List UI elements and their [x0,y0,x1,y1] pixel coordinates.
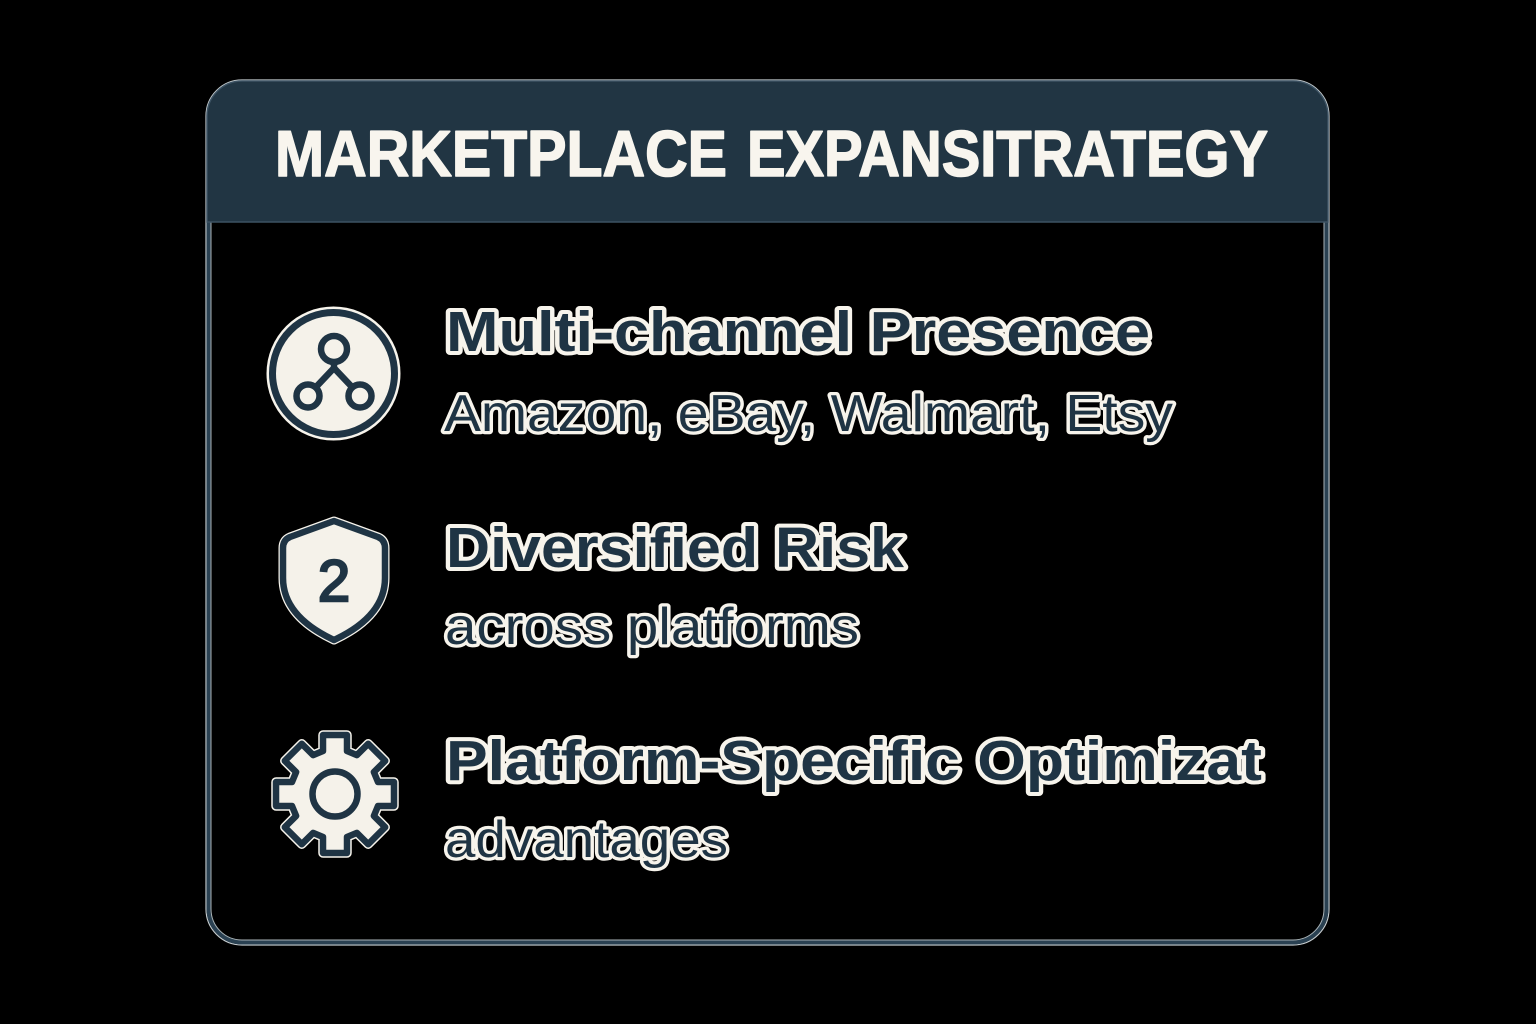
panel: marketplace expansion card [206,80,1329,945]
heading: platform-specific optimization: Platform-Specific Optimizat [446,729,1262,793]
text: marketplaces list: Amazon, eBay, Walmart, Etsy [444,385,1173,443]
header band [207,81,1328,222]
heading: diversified risk: Diversified Risk [446,516,904,580]
number 2: 2 [318,549,350,614]
title: MARKETPLACE [275,117,727,190]
text: across platforms: across platforms [445,598,859,656]
icon: gear [276,735,394,853]
title: EXPANSITRATEGY [747,117,1268,190]
heading: multi-channel presence: Multi-channel Presence [446,300,1150,364]
icon: network nodes in circle [266,306,400,440]
text: advantages: advantages [445,811,728,869]
icon: shield with number 2 [283,521,385,640]
title [275,117,1268,190]
